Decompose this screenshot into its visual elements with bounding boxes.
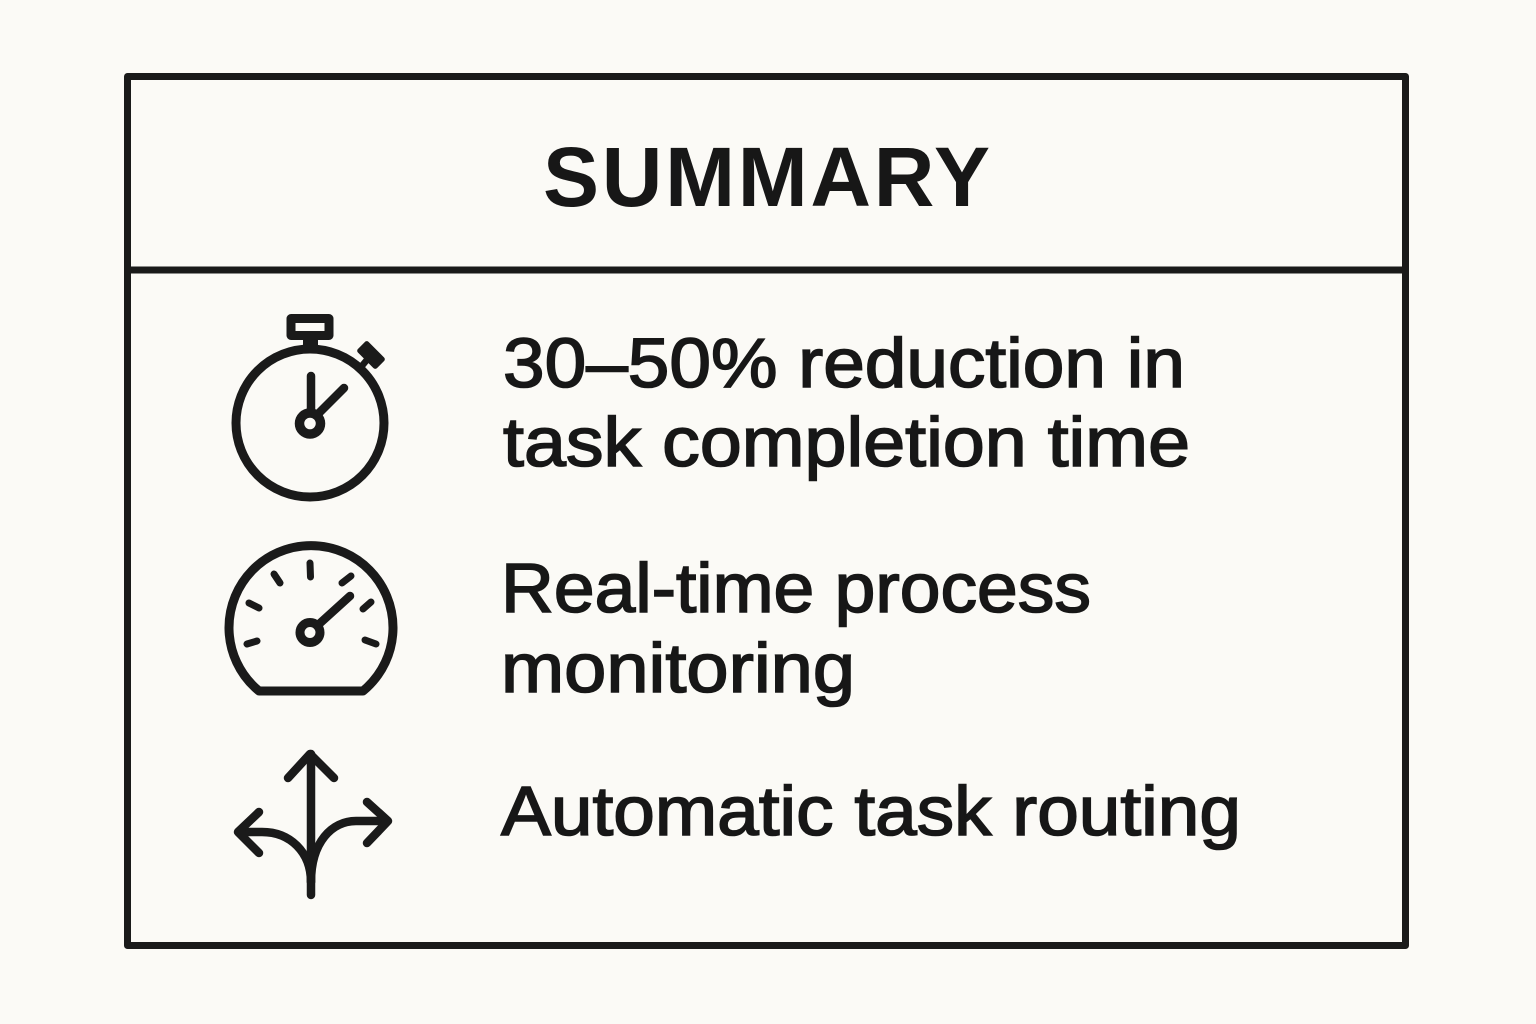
text: task completion time: 30–50% reduction in (503, 324, 1185, 402)
text: task completion time: task completion time (503, 403, 1190, 481)
title: SUMMARY (543, 130, 990, 224)
text: process monitoring: monitoring (501, 629, 855, 707)
icon: stopwatch (236, 318, 386, 497)
icon: speedometer gauge (229, 546, 393, 691)
panel: summary frame (128, 76, 1406, 946)
text: process monitoring: Real-time process (501, 549, 1091, 627)
text: task completion time (503, 324, 1190, 481)
text: automatic task routing: Automatic task routing (501, 772, 1241, 850)
text: process monitoring (501, 549, 1091, 707)
icon: branching arrows (238, 754, 388, 895)
